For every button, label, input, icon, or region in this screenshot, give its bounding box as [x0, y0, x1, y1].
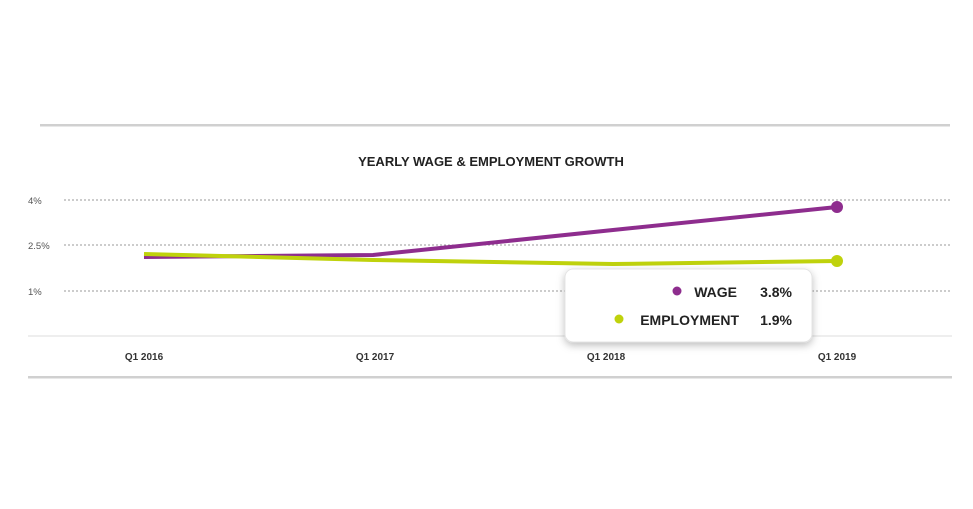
tooltip: EMPLOYMENT — [640, 312, 739, 328]
y axis labels — [28, 196, 50, 298]
line: employment — [144, 254, 843, 267]
line: wage — [144, 201, 843, 257]
y axis labels: 2.5% — [28, 241, 50, 252]
tooltip — [565, 269, 812, 342]
x axis labels: Q1 2018 — [587, 352, 626, 363]
x axis labels: Q1 2017 — [356, 352, 395, 363]
title: YEARLY WAGE & EMPLOYMENT GROWTH — [358, 154, 624, 169]
tooltip: WAGE — [694, 284, 737, 300]
y axis labels: 1% — [28, 287, 42, 298]
x axis labels — [125, 352, 857, 363]
tooltip: 1.9% — [760, 312, 793, 328]
x axis labels: Q1 2019 — [818, 352, 857, 363]
y axis labels: 4% — [28, 196, 42, 207]
tooltip: 3.8% — [760, 284, 793, 300]
x axis labels: Q1 2016 — [125, 352, 164, 363]
